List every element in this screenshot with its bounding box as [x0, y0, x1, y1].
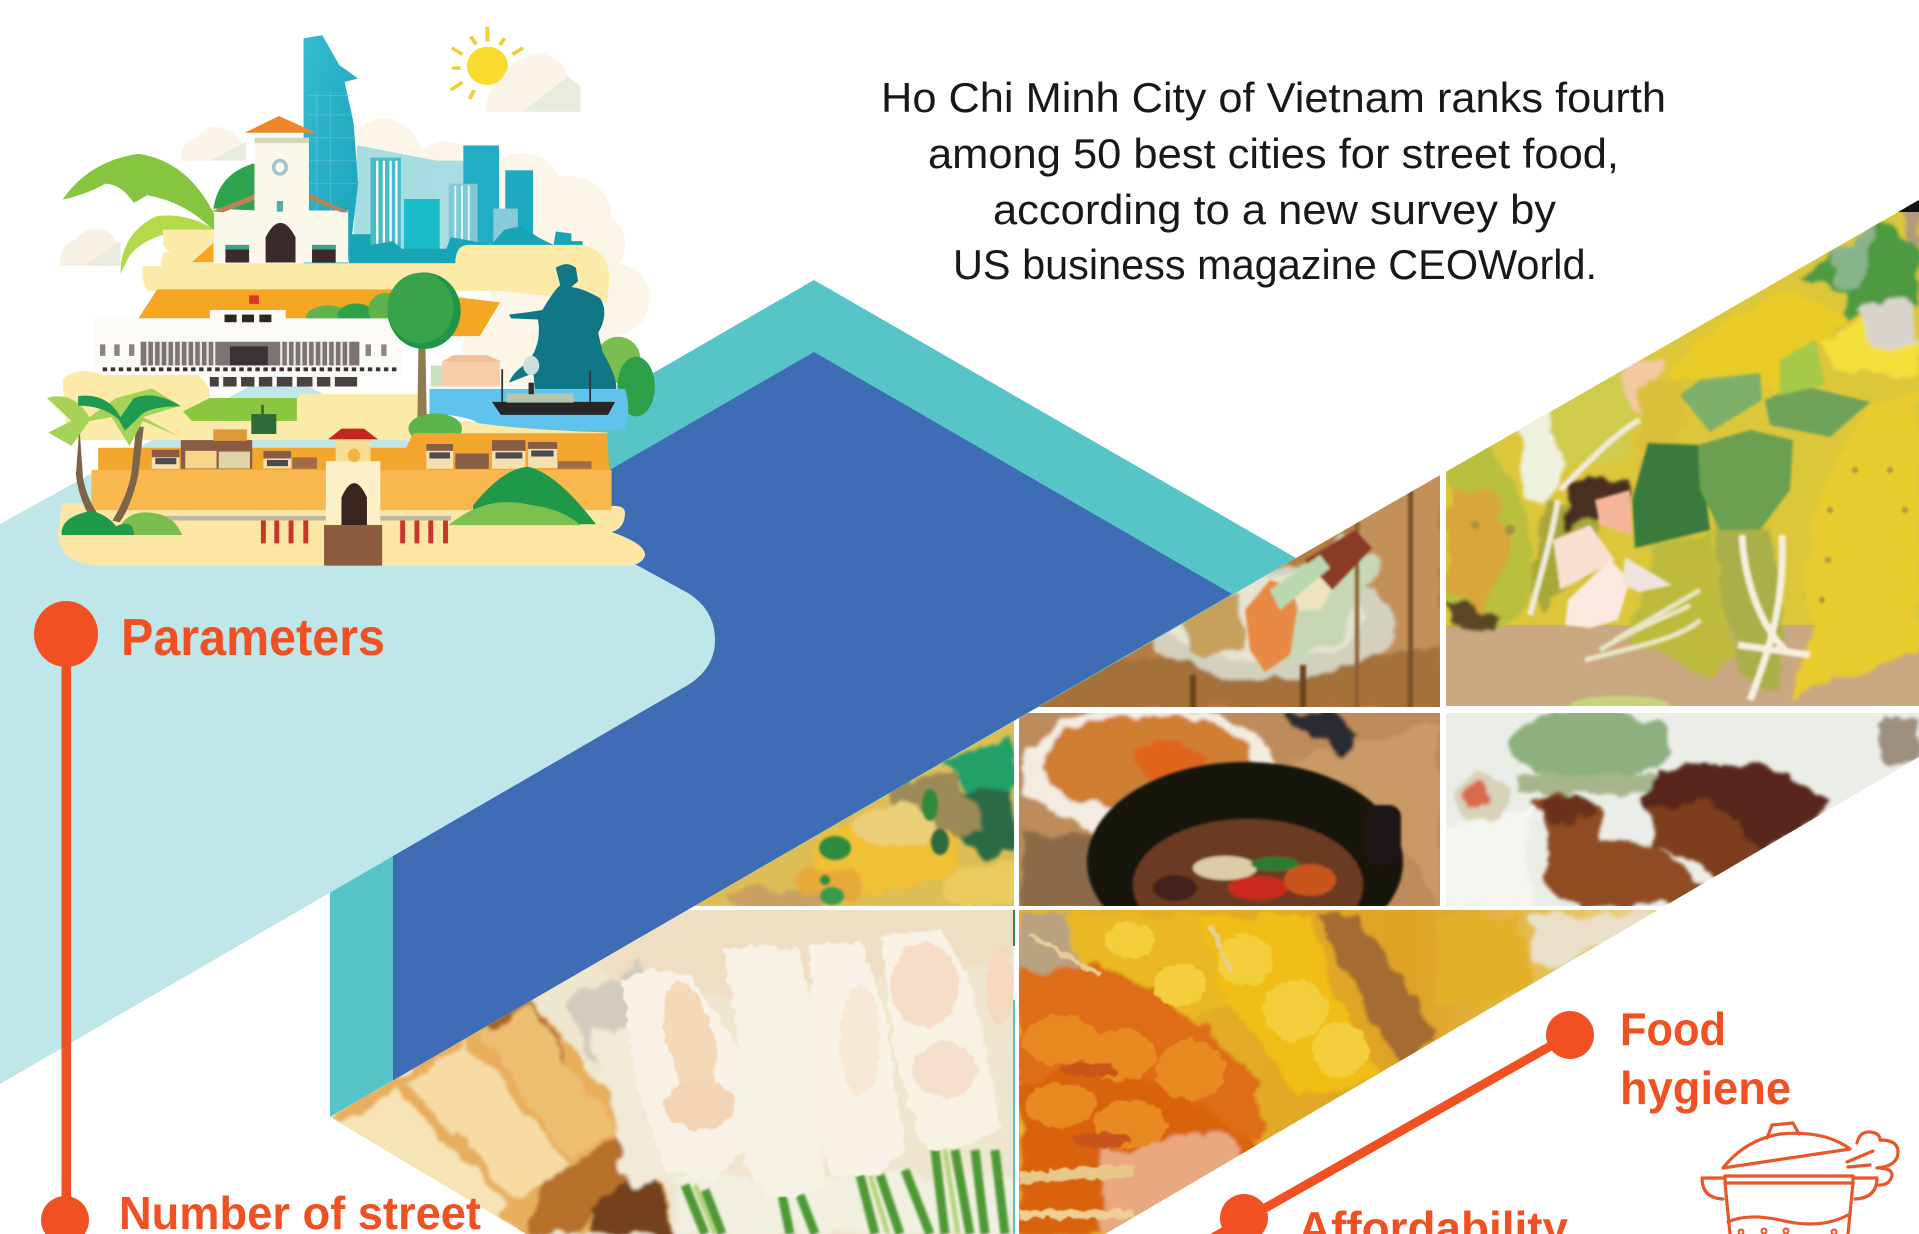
sand band lower: [62, 371, 607, 440]
sun: [451, 27, 523, 111]
panel: blue hexagon: [393, 352, 1232, 1081]
panel: food photo collage: [330, 180, 1919, 1234]
river: [429, 389, 628, 431]
label: Food hygiene: Food: [1620, 1003, 1726, 1055]
skyscrapers: [304, 35, 583, 264]
intro text: according to a new survey by: [993, 186, 1556, 233]
photo: clay pot and noodles: [1019, 713, 1440, 906]
citadel gate: [324, 429, 382, 566]
thin teal and green edge lines: [1013, 910, 1015, 1234]
timeline dot: Food hygiene: [1546, 1011, 1594, 1059]
Ben Thanh market: [192, 116, 350, 263]
lawn and tank: [183, 398, 297, 434]
timeline dot: Number of street: [41, 1196, 89, 1234]
photo: roast duck: [1446, 709, 1919, 907]
intro text: among 50 best cities for street food,: [928, 130, 1619, 177]
photo: egg dish on banana leaf: [691, 721, 1014, 908]
orange old-town band: [98, 433, 609, 471]
bush by river: [408, 413, 462, 444]
palm trees: [47, 388, 181, 522]
connector line: affordability to food hygiene: [1200, 1035, 1570, 1234]
intro text: Ho Chi Minh City of Vietnam ranks fourth: [881, 74, 1666, 121]
big tree: [387, 272, 461, 419]
intro text: [881, 74, 1666, 288]
orange band middle: [138, 289, 500, 337]
palace greenery: [306, 293, 404, 330]
heading: Parameters: Parameters: [121, 609, 385, 667]
old town houses: [152, 429, 591, 469]
icon: pot bubbles: [1738, 1228, 1836, 1234]
photo gutters: [688, 707, 1664, 1234]
pink colonial building: [431, 355, 502, 387]
statue: [509, 264, 616, 390]
hill right: [449, 467, 596, 525]
photo: yellow banh xeo pancake with mint: [1446, 180, 1919, 714]
bushes right: [596, 337, 655, 416]
label: Food hygiene: hygiene: [1620, 1062, 1791, 1114]
photo: orange grilled skewers: [1019, 910, 1658, 1234]
Independence Palace: [94, 295, 402, 387]
panel: light blue parameters block: [0, 370, 715, 1084]
icon: cooking pot with steam: [1702, 1123, 1898, 1234]
ground bushes: [62, 511, 182, 535]
timeline dot: Affordability: [1220, 1194, 1268, 1234]
photo: rolls on a plate on wood: [1035, 475, 1440, 709]
photo: fresh and fried spring rolls: [330, 905, 1014, 1234]
guards: [263, 520, 446, 543]
timeline line: [62, 640, 71, 1230]
sand base: [58, 503, 645, 566]
panel: teal hexagon backdrop: [330, 280, 1296, 1117]
cloud near sun: [486, 54, 581, 112]
cloud far left: [60, 229, 121, 266]
intro text: US business magazine CEOWorld.: [953, 241, 1597, 288]
green hills left: [62, 154, 257, 274]
illustration: Ho Chi Minh City landmarks: [47, 27, 655, 566]
cream cloud mass behind skyline: [346, 119, 650, 387]
fortress wall: [92, 470, 612, 510]
ship: [492, 356, 615, 415]
timeline dot: Parameters: [34, 601, 98, 667]
cloud left: [181, 127, 246, 161]
sand band upper: [142, 230, 609, 302]
